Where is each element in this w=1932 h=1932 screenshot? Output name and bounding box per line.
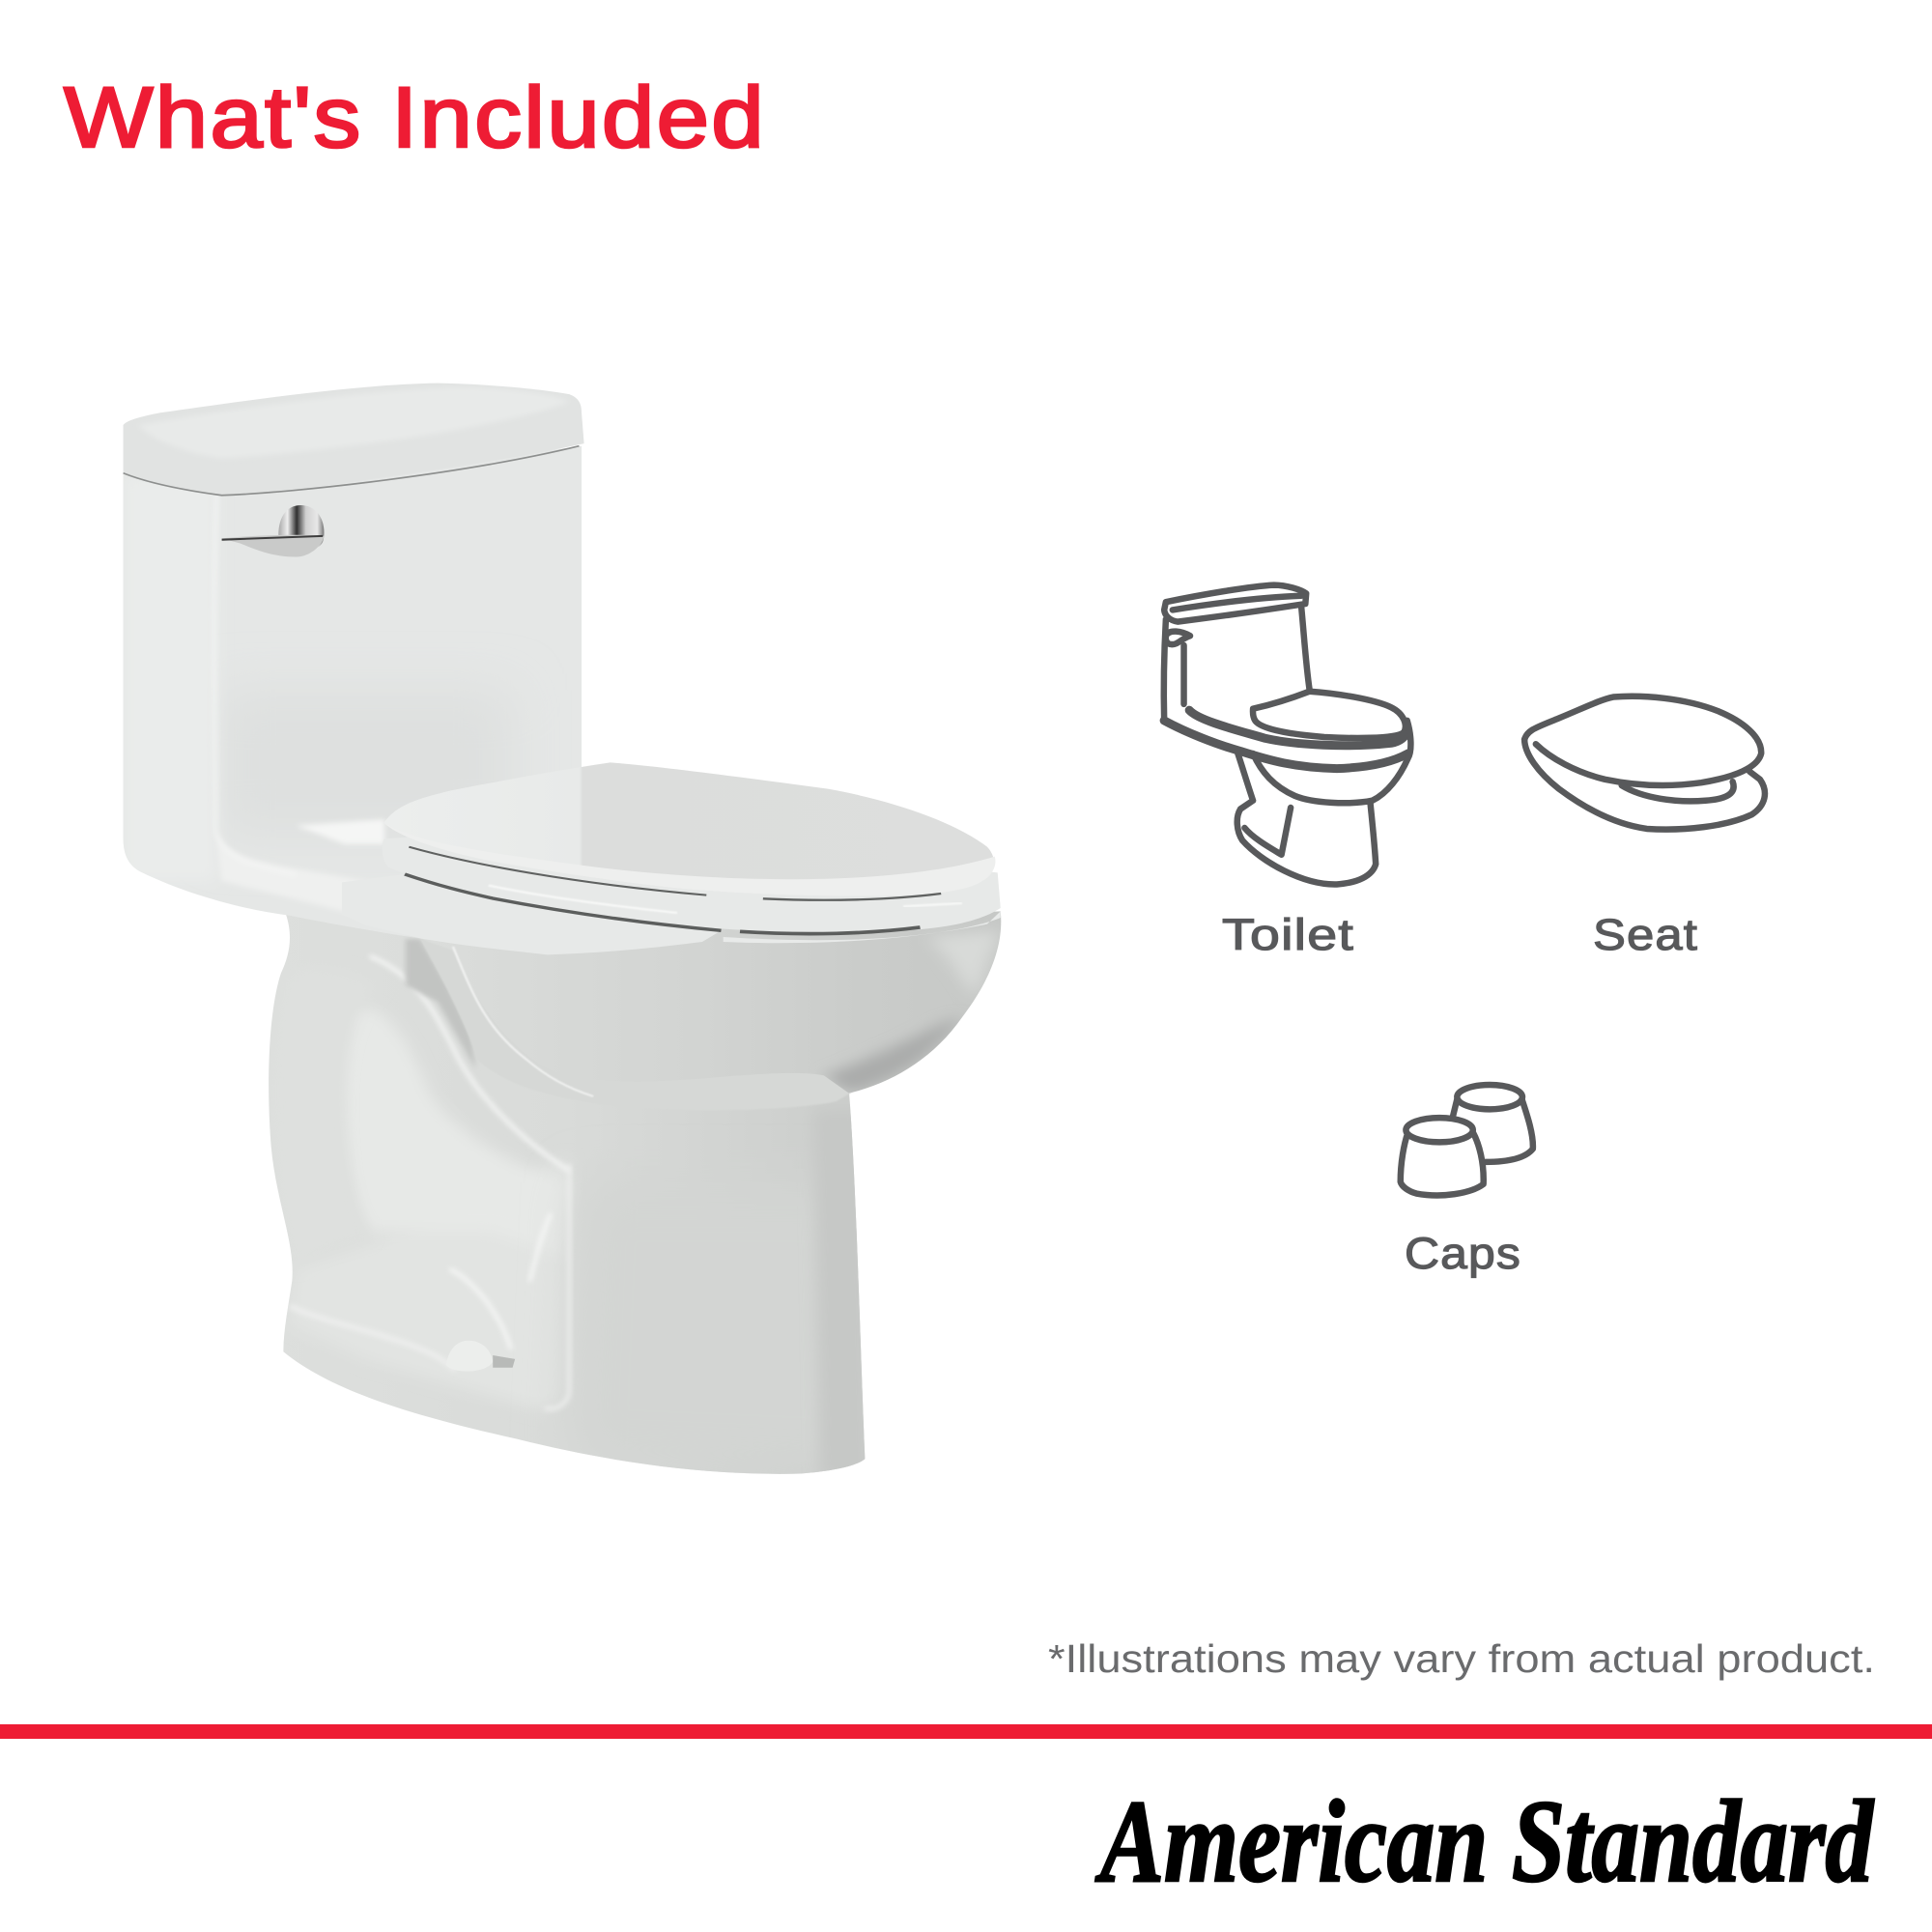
title: What's Included (64, 69, 766, 165)
flush handle (222, 505, 324, 557)
icon: toilet line drawing (1164, 585, 1410, 884)
bowl, seat ring and seat lid (342, 762, 1001, 1110)
product photo: one-piece toilet (124, 384, 1001, 1479)
floor bolt cap (446, 1341, 515, 1372)
seat lid (384, 762, 995, 900)
red divider bar (0, 1724, 1932, 1739)
tank and deck (124, 446, 582, 937)
label: Toilet: Toilet (1222, 910, 1354, 959)
tank lid (124, 384, 584, 496)
pedestal ledge (420, 939, 853, 1110)
icon: caps line drawing (1401, 1085, 1533, 1195)
footnote: *Illustrations may vary from actual product. (1048, 1636, 1875, 1681)
deck front strip (342, 874, 721, 954)
seat ring (383, 834, 1001, 943)
icon: seat line drawing (1524, 696, 1765, 830)
label: Seat: Seat (1593, 910, 1698, 959)
label: Caps: Caps (1405, 1229, 1521, 1278)
shadow behind bowl (406, 939, 476, 1069)
toilet pedestal (269, 914, 868, 1479)
bowl (453, 911, 1001, 1096)
